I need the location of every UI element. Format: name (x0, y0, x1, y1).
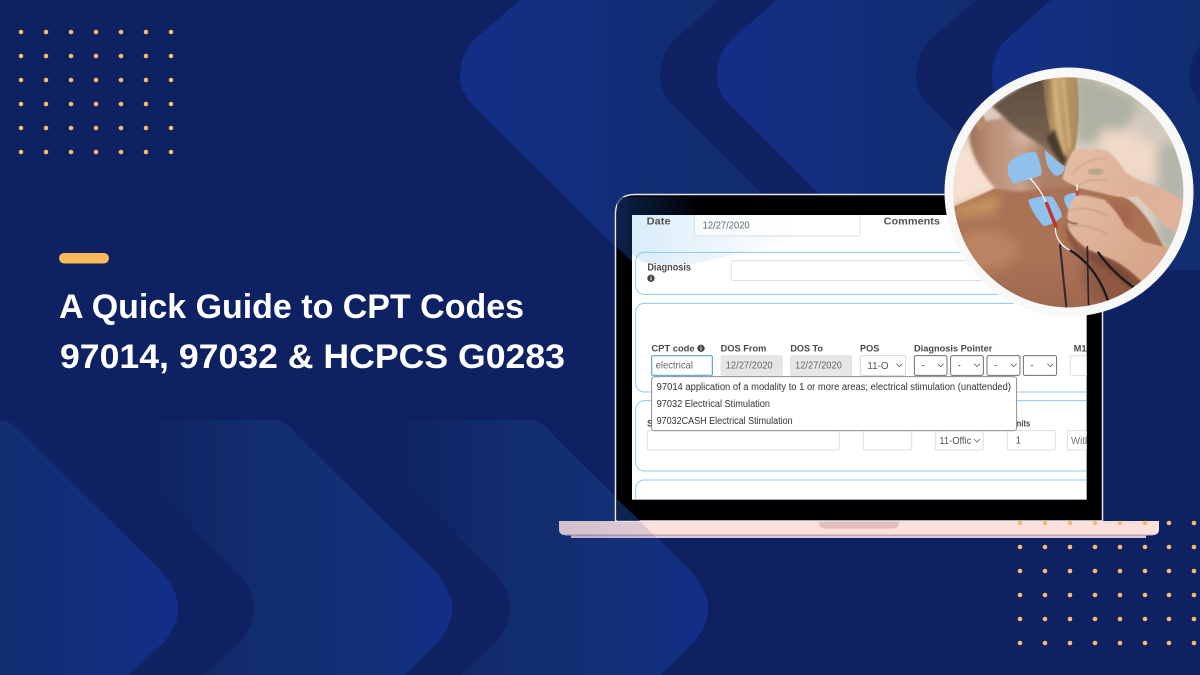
photo background (953, 77, 1184, 308)
electrode pads (1008, 150, 1077, 226)
chevron tint at bezel corner (617, 499, 640, 521)
panel: CPT code row: - (994, 361, 997, 372)
laptop screen (632, 215, 1087, 500)
skin highlights (953, 128, 1137, 307)
panel: service row: With (1071, 436, 1090, 447)
autocomplete dropdown: 97032 Electrical Stimulation (657, 399, 770, 410)
laptop bezel (616, 194, 1102, 521)
panel: CPT code row: - (1030, 361, 1034, 372)
title (59, 288, 565, 376)
laptop (559, 194, 1159, 547)
date row (647, 215, 940, 236)
photo circle: electrodes on neck (944, 68, 1194, 320)
panel: service row: nits (1017, 419, 1030, 429)
neck (970, 110, 1077, 192)
panel: CPT code row: electrical (656, 360, 693, 371)
hand shadow (1065, 227, 1143, 290)
panel: service row: 11-Offic (939, 436, 971, 447)
autocomplete dropdown (652, 377, 1017, 431)
wires (1030, 178, 1135, 310)
accent bar (59, 253, 109, 264)
dot grid: top left (19, 30, 173, 154)
date row: Comments (884, 217, 940, 228)
panel: service row (636, 401, 1136, 471)
hair (992, 73, 1079, 167)
panel: CPT code row: 11-O (867, 361, 889, 372)
title: A Quick Guide to CPT Codes (59, 288, 524, 326)
hands (1063, 149, 1185, 283)
panel: CPT code row: DOS From (721, 343, 766, 353)
panel: diagnosis (635, 252, 999, 295)
bottom chevrons (0, 420, 708, 675)
panel: CPT code row: 12/27/2020 (726, 361, 773, 372)
title: 97014, 97032 & HCPCS G0283 (60, 338, 565, 376)
panel: CPT code row: Diagnosis Pointer (914, 343, 993, 353)
panel: CPT code row (636, 303, 1136, 392)
chevron tint over bezel (617, 197, 700, 262)
ear (976, 115, 986, 131)
laptop base (559, 521, 1159, 538)
panel: CPT code row: - (921, 361, 925, 372)
back (954, 184, 1166, 308)
panel: service row: 1 (1016, 435, 1021, 446)
panel: CPT code row: CPT code (651, 343, 695, 353)
panel: CPT code row: DOS To (790, 343, 823, 353)
panel: CPT code row: M1 (1074, 343, 1087, 353)
panel: diagnosis: Diagnosis (647, 262, 691, 273)
panel: CPT code row: 12/27/2020 (795, 361, 842, 372)
panel: CPT code row: POS (860, 343, 879, 353)
autocomplete dropdown: 97032CASH Electrical Stimulation (657, 416, 793, 427)
panel: empty lower (635, 480, 1087, 499)
autocomplete dropdown: 97014 application of a modality to 1 or more areas; electrical stimulation (unattended) (657, 382, 1011, 393)
panel: CPT code row: - (958, 361, 961, 372)
panel: service row: S (647, 419, 653, 429)
date row: 12/27/2020 (703, 220, 750, 231)
dot grid: bottom right (1018, 521, 1196, 645)
top chevrons (460, 0, 1200, 270)
date row: Date (647, 217, 671, 228)
